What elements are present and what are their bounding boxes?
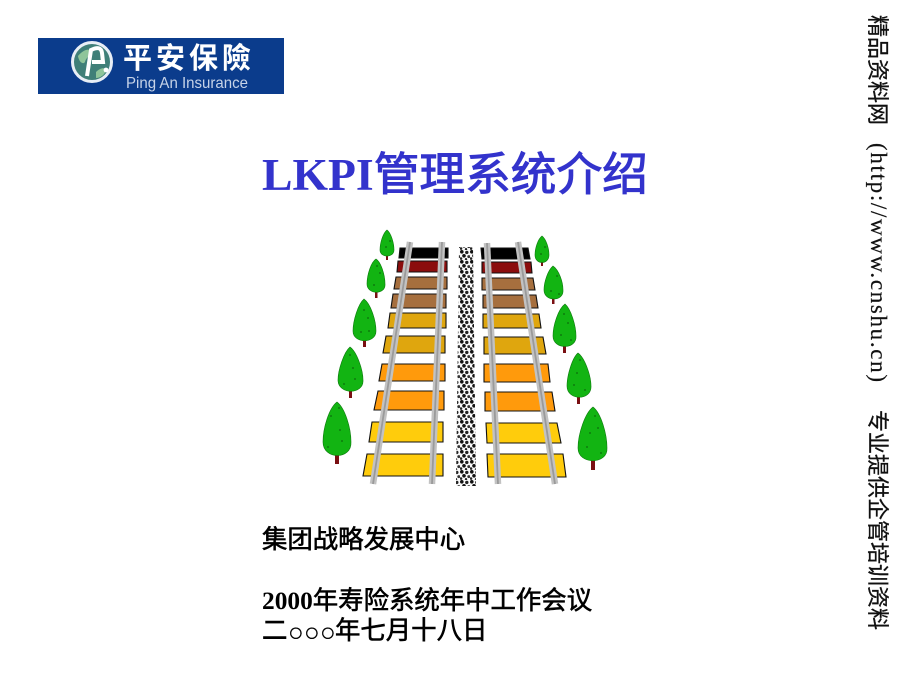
organiser line: 集团战略发展中心 bbox=[262, 526, 465, 554]
logo English name: Ping An Insurance bbox=[126, 75, 248, 92]
vertical watermark text bbox=[865, 15, 891, 630]
tree right 5 bbox=[578, 407, 607, 470]
date bbox=[262, 617, 487, 647]
date: ○ bbox=[320, 618, 336, 647]
tree right 1 bbox=[535, 236, 549, 266]
tree right 3 bbox=[553, 304, 576, 353]
logo emblem bbox=[72, 42, 112, 82]
illustration: railway tracks with trees bbox=[323, 230, 607, 486]
watermark url: (http://www.cnshu.cn) bbox=[866, 143, 891, 382]
date: ○ bbox=[288, 618, 304, 647]
title: LKPI管理系统介绍 bbox=[262, 149, 648, 200]
date: 年七月十八日 bbox=[335, 617, 487, 645]
centre gravel strip bbox=[456, 247, 476, 486]
logo Chinese name: 平安保險 bbox=[123, 35, 251, 77]
right track bbox=[481, 242, 566, 484]
tree left 5 bbox=[323, 402, 351, 464]
tree left 1 bbox=[380, 230, 394, 260]
meeting name: 2000年寿险系统年中工作会议 bbox=[262, 587, 592, 615]
logo: Ping An Insurance bbox=[38, 35, 284, 94]
tree left 2 bbox=[367, 259, 385, 298]
date: 二 bbox=[262, 617, 287, 645]
date: ○ bbox=[304, 618, 320, 647]
tree right 2 bbox=[544, 266, 563, 304]
tree left 4 bbox=[338, 347, 363, 398]
left track bbox=[363, 242, 448, 484]
watermark slogan: 专业提供企管培训资料 bbox=[865, 410, 890, 630]
tree left 3 bbox=[353, 299, 376, 347]
watermark site name: 精品资料网 bbox=[865, 15, 890, 125]
tree right 4 bbox=[567, 353, 591, 404]
